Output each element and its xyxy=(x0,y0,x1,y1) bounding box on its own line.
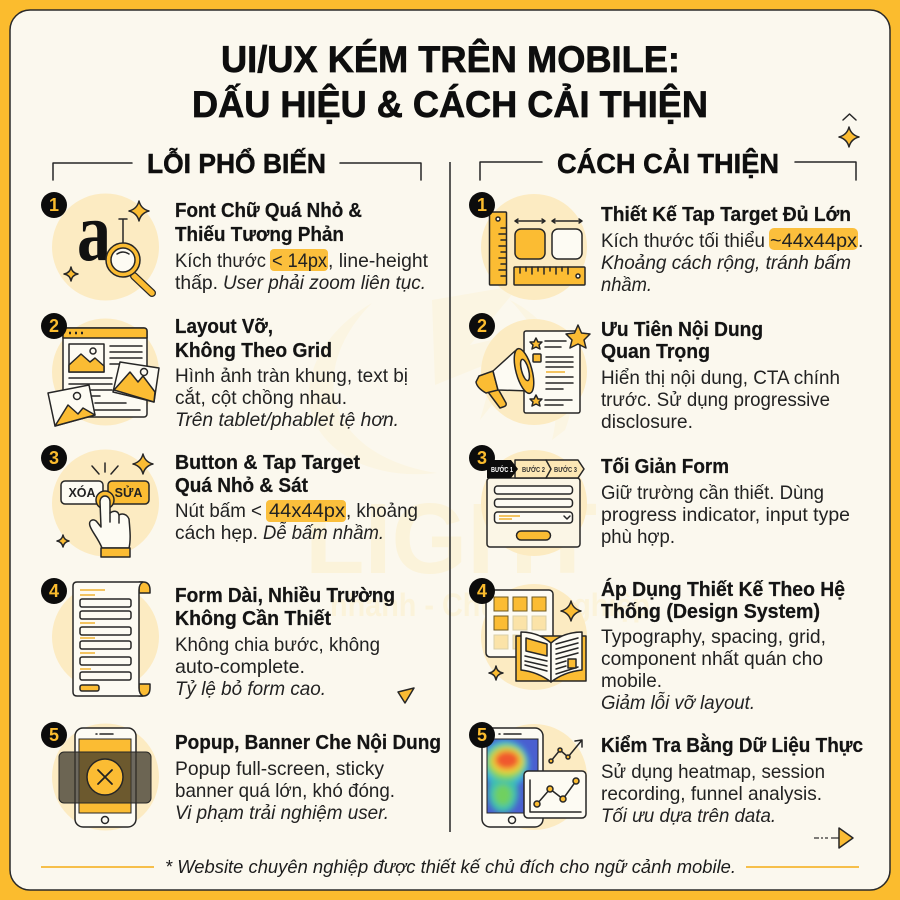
body 4: Giảm lỗi vỡ layout. xyxy=(601,691,755,714)
body 3: Dễ bấm nhầm. xyxy=(263,521,384,544)
watermark: nhanh - Chuyên nghiệp xyxy=(330,587,650,623)
body 1: Kích thước tối thiểu xyxy=(601,230,765,252)
heading: improvements: CÁCH CẢI THIỆN xyxy=(557,147,779,179)
body 1: thấp. xyxy=(175,272,218,294)
fix item 4 xyxy=(469,578,845,714)
center divider xyxy=(449,162,451,832)
icon: stepped form xyxy=(481,450,587,556)
body 1: Khoảng cách rộng, tránh bấm xyxy=(601,252,851,274)
watermark xyxy=(305,285,650,623)
badge 4 xyxy=(41,578,67,604)
body 1 xyxy=(601,228,863,296)
icon: heatmap and charts xyxy=(481,724,587,830)
badge 4 xyxy=(469,578,495,604)
badge 1 xyxy=(41,192,67,218)
body 1: . xyxy=(858,230,863,252)
fix item 5 xyxy=(469,722,863,830)
fix item 3 xyxy=(469,445,850,556)
heading 5: Popup, Banner Che Nội Dung xyxy=(175,732,441,754)
body 3: 44x44px xyxy=(269,500,345,522)
body 2 xyxy=(601,367,840,433)
badge 5: 5 xyxy=(477,725,487,745)
error item 3 xyxy=(41,445,418,557)
icon: stepped form: BƯỚC 3 xyxy=(554,465,577,474)
error item 2 xyxy=(41,313,408,431)
body 1: Kích thước xyxy=(175,250,266,272)
icon: design system grid and book xyxy=(481,584,587,690)
footer note: * Website chuyên nghiệp được thiết kế chủ đích cho ngữ cảnh mobile. xyxy=(165,856,736,877)
heading 4 xyxy=(175,585,395,630)
heading 2: Quan Trọng xyxy=(601,341,710,363)
heading 3 xyxy=(175,452,360,497)
fix item 2 xyxy=(469,313,840,433)
icon: stepped form: BƯỚC 2 xyxy=(522,465,545,474)
icon: stepped form: BƯỚC 1 xyxy=(491,465,513,474)
heading 2: Ưu Tiên Nội Dung xyxy=(601,319,763,341)
badge 4: 4 xyxy=(477,581,487,601)
badge 1: 1 xyxy=(477,195,487,215)
decoration: arrow xyxy=(814,828,853,848)
body 3 xyxy=(175,500,418,544)
heading 2: Layout Vỡ, xyxy=(175,316,273,338)
badge 1 xyxy=(469,192,495,218)
body 4: Typography, spacing, grid, xyxy=(601,626,826,648)
heading 2 xyxy=(601,319,763,363)
body 1: ~44x44px xyxy=(770,230,857,252)
heading 1 xyxy=(175,200,362,246)
heading 4: Thống (Design System) xyxy=(601,601,820,623)
icon: small font under magnifier: a xyxy=(77,186,111,279)
icon: broken layout xyxy=(48,318,159,426)
fix item 1 xyxy=(469,192,863,300)
badge 3: 3 xyxy=(49,448,59,468)
heading: errors: LỖI PHỔ BIẾN xyxy=(147,148,326,179)
panel: improvements xyxy=(469,147,863,830)
body 4 xyxy=(175,634,380,700)
body 3: Nút bấm < xyxy=(175,500,262,522)
heading: improvements xyxy=(480,147,856,180)
body 2: Trên tablet/phablet tệ hơn. xyxy=(175,409,399,431)
body 5: Tối ưu dựa trên data. xyxy=(601,805,776,827)
body 5: recording, funnel analysis. xyxy=(601,783,822,805)
heading 5: Kiểm Tra Bằng Dữ Liệu Thực xyxy=(601,733,863,757)
heading 1: Thiết Kế Tap Target Đủ Lớn xyxy=(601,204,851,226)
badge 3 xyxy=(469,445,495,471)
body 5 xyxy=(601,761,825,827)
body 1: < 14px xyxy=(272,250,327,272)
icon: small tap targets: SỬA xyxy=(115,485,142,500)
icon: long form xyxy=(52,582,159,696)
badge 3: 3 xyxy=(477,448,487,468)
body 5 xyxy=(175,758,395,824)
body 3 xyxy=(601,482,850,548)
heading 3: Quá Nhỏ & Sát xyxy=(175,475,308,497)
body 4: Không chia bước, không xyxy=(175,634,380,656)
icon: small font under magnifier xyxy=(52,186,159,300)
icon: megaphone and content list xyxy=(476,319,590,425)
badge 2: 2 xyxy=(49,316,59,336)
body 3: phù hợp. xyxy=(601,526,675,548)
heading 1: Thiếu Tương Phản xyxy=(175,224,344,246)
body 3: , khoảng xyxy=(346,500,418,522)
error item 5 xyxy=(41,722,441,830)
decoration: triangle xyxy=(398,688,414,703)
icon: popup covering phone xyxy=(52,724,159,830)
body 5: Vi phạm trải nghiệm user. xyxy=(175,802,389,824)
body 3: progress indicator, input type xyxy=(601,504,850,526)
heading 4: Áp Dụng Thiết Kế Theo Hệ xyxy=(601,578,845,601)
error item 1 xyxy=(41,186,429,300)
badge 4: 4 xyxy=(49,581,59,601)
body 1: User phải zoom liên tục. xyxy=(223,272,426,294)
body 5: banner quá lớn, khó đóng. xyxy=(175,780,395,802)
icon: small tap targets: XÓA xyxy=(68,485,96,500)
badge 3 xyxy=(41,445,67,471)
decoration: chevron and sparkle xyxy=(839,114,859,147)
body 2: Hình ảnh tràn khung, text bị xyxy=(175,365,408,387)
heading 4: Form Dài, Nhiều Trường xyxy=(175,585,395,607)
panel: common errors xyxy=(41,148,441,830)
watermark: LIGHT xyxy=(305,483,597,595)
heading 3: Tối Giản Form xyxy=(601,456,729,478)
error item 4 xyxy=(41,578,395,700)
body 4 xyxy=(601,626,826,714)
body 4: mobile. xyxy=(601,670,662,692)
body 2: trước. Sử dụng progressive xyxy=(601,389,830,411)
badge 2: 2 xyxy=(477,316,487,336)
body 2: cắt, cột chồng nhau. xyxy=(175,386,347,409)
badge 1: 1 xyxy=(49,195,59,215)
body 5: Sử dụng heatmap, session xyxy=(601,761,825,783)
heading 4: Không Cần Thiết xyxy=(175,608,331,630)
body 1: nhầm. xyxy=(601,274,652,296)
body 2 xyxy=(175,365,408,431)
icon: rulers and tap targets xyxy=(481,194,587,300)
heading 1: Font Chữ Quá Nhỏ & xyxy=(175,200,362,222)
body 2: Hiển thị nội dung, CTA chính xyxy=(601,367,840,389)
title xyxy=(192,38,708,125)
body 4: Tỷ lệ bỏ form cao. xyxy=(175,678,326,700)
heading 2 xyxy=(175,316,332,362)
body 3: cách hẹp. xyxy=(175,522,258,544)
body 2: disclosure. xyxy=(601,411,693,433)
badge 5 xyxy=(469,722,495,748)
heading: errors xyxy=(53,148,421,180)
title: DẤU HIỆU & CÁCH CẢI THIỆN xyxy=(192,83,708,125)
body 5: Popup full-screen, sticky xyxy=(175,758,384,780)
badge 5: 5 xyxy=(49,725,59,745)
icon: small tap targets xyxy=(52,450,159,557)
badge 2 xyxy=(41,313,67,339)
body 4: component nhất quán cho xyxy=(601,648,823,670)
title: UI/UX KÉM TRÊN MOBILE: xyxy=(221,38,680,80)
badge 5 xyxy=(41,722,67,748)
badge 2 xyxy=(469,313,495,339)
heading 4 xyxy=(601,578,845,623)
body 1 xyxy=(175,249,429,294)
body 1: , line-height xyxy=(328,250,429,272)
body 3: Giữ trường cần thiết. Dùng xyxy=(601,482,824,504)
body 4: auto-complete. xyxy=(175,656,305,678)
heading 2: Không Theo Grid xyxy=(175,340,332,362)
heading 3: Button & Tap Target xyxy=(175,452,360,474)
